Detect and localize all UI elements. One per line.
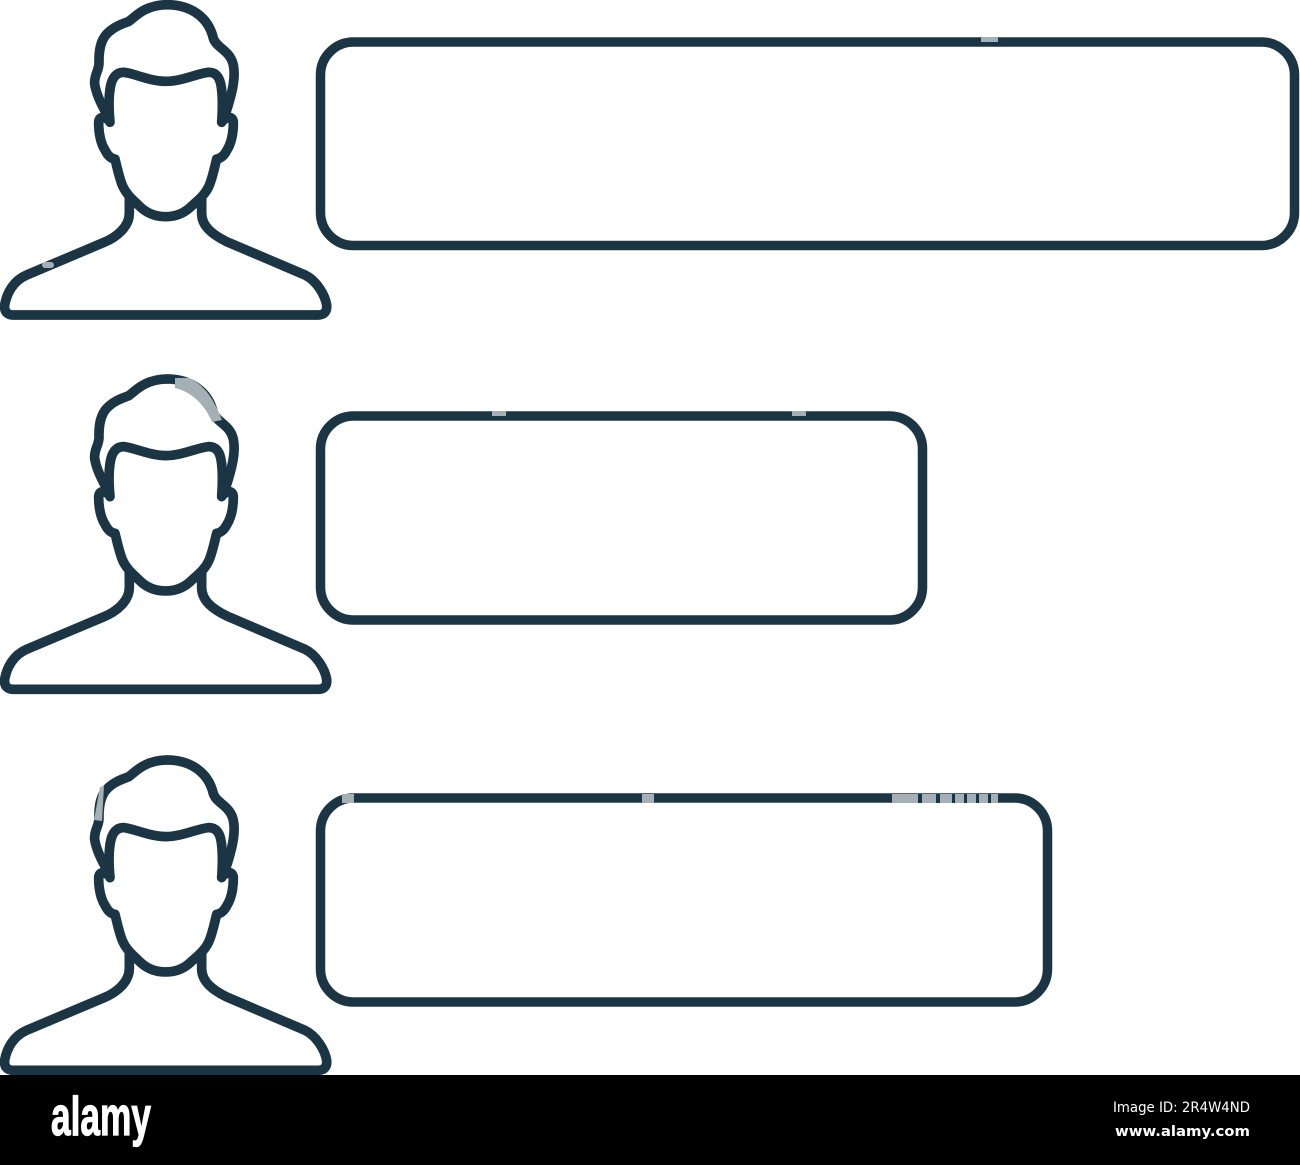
row 3: empty message box	[320, 798, 1048, 1002]
row 2: empty message box	[320, 416, 922, 620]
row 1: person icon	[5, 5, 327, 315]
watermark fragments over the line work	[42, 37, 998, 821]
footer: alamy logo wordmark: alamy	[51, 1085, 151, 1147]
footer: image id: Image ID: 2R4W4ND	[1113, 1100, 1250, 1116]
footer bar	[0, 1075, 1300, 1165]
watermark stripes on third box	[918, 794, 991, 803]
row 3: person icon	[5, 760, 327, 1070]
footer: website: www.alamy.com	[1115, 1124, 1250, 1140]
row 2: person icon	[5, 379, 327, 689]
row 1: empty message box	[320, 42, 1294, 246]
